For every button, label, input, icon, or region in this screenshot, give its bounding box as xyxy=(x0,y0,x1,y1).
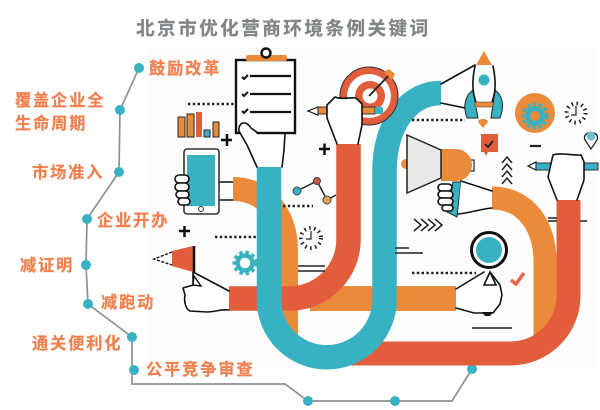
icon: check note xyxy=(481,134,498,156)
icon: dot graph xyxy=(293,178,336,204)
decorative lines xyxy=(395,218,587,328)
label: 减证明: 减证明 xyxy=(20,257,74,275)
label: 覆盖企业全生命周期: 生命周期 xyxy=(15,114,87,133)
label: 减跑动: 减跑动 xyxy=(101,294,155,312)
icon: target with arrow xyxy=(340,67,398,125)
timeline of keywords xyxy=(81,63,477,406)
icon: red check xyxy=(511,273,524,284)
icon: clock xyxy=(301,228,321,248)
label: 鼓励改革: 鼓励改革 xyxy=(149,59,221,78)
icon: gear xyxy=(234,252,256,274)
decorative lines xyxy=(298,266,325,271)
icon: plus xyxy=(319,144,330,155)
icon: clock xyxy=(566,104,586,122)
dotted line xyxy=(215,236,257,238)
icon: plus xyxy=(221,134,232,146)
dotted line xyxy=(188,103,236,105)
timeline dots xyxy=(81,63,477,406)
tube: red right and bottom xyxy=(345,200,569,354)
icon: location pin xyxy=(584,132,598,149)
icon: bar chart xyxy=(178,112,219,137)
icon: clipboard in hand xyxy=(236,48,295,167)
tube: orange left xyxy=(233,189,286,337)
label: 企业开办: 企业开办 xyxy=(97,211,169,230)
icon: pencil in hand xyxy=(528,154,598,200)
icon: loudspeaker in hand xyxy=(401,135,492,217)
icon: pencil in hand xyxy=(308,97,383,144)
tube: orange horizontal xyxy=(310,286,456,311)
icon: plus xyxy=(179,226,190,237)
icon: right chevrons xyxy=(414,219,442,231)
icon: megaphone in hand xyxy=(154,246,229,312)
title: 北京市优化营商环境条例关键词 xyxy=(136,18,431,39)
tube: teal S-curve xyxy=(269,93,441,357)
keyword labels xyxy=(15,59,255,379)
label: 通关便利化: 通关便利化 xyxy=(32,334,122,353)
dotted line xyxy=(412,272,476,274)
icon: magnifier in hand xyxy=(456,232,506,316)
dotted line xyxy=(412,119,465,121)
icon: phone in hand xyxy=(175,149,233,214)
timeline line xyxy=(86,68,472,401)
label: 市场准入: 市场准入 xyxy=(32,163,104,182)
label: 覆盖企业全生命周期: 覆盖企业全 xyxy=(15,92,105,110)
icon: rocket in hand xyxy=(441,51,502,128)
illustration backdrop xyxy=(148,46,597,368)
icon: up chevrons xyxy=(502,157,512,184)
tube: orange right xyxy=(492,198,545,340)
icon: light bulb with gear xyxy=(515,93,555,146)
dotted line xyxy=(283,205,313,207)
tube: red middle xyxy=(229,144,348,298)
label: 公平竞争审查: 公平竞争审查 xyxy=(146,360,255,379)
